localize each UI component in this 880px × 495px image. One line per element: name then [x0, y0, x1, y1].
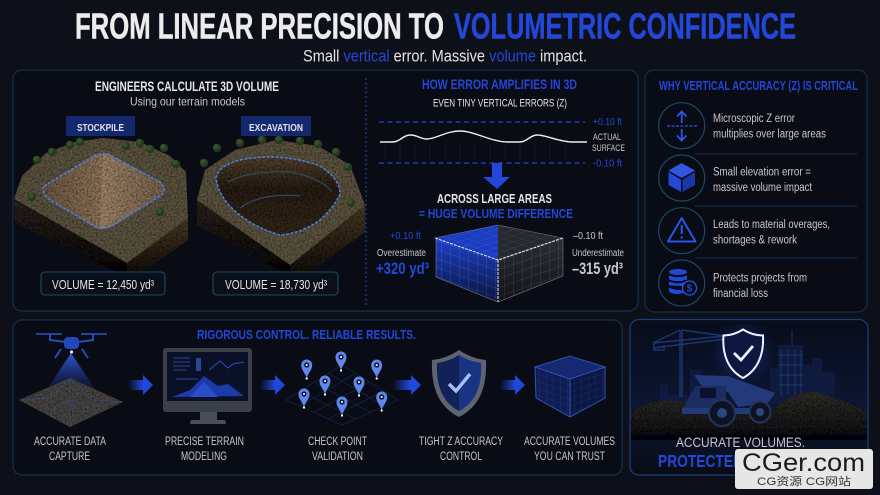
title: FROM LINEAR PRECISION TO	[75, 6, 444, 46]
item: financial loss: Protects projects from	[713, 272, 807, 284]
terrain: stockpile	[14, 138, 188, 272]
item: Z error multiplies: Microscopic Z error	[713, 113, 795, 125]
panel: rigorous control workflow	[13, 320, 622, 475]
step: accurate volumes	[524, 356, 615, 463]
callout: underestimate: Underestimate	[572, 248, 624, 259]
heading: across large areas: ACROSS LARGE AREAS	[437, 192, 552, 206]
arrow: step 1 to 2	[128, 375, 153, 395]
step: check point validation: CHECK POINT	[308, 436, 367, 448]
item: Z error multiplies: multiplies over large areas	[713, 128, 826, 140]
step: check point validation	[286, 352, 398, 463]
arrow: down	[483, 163, 510, 189]
item: material overages: Leads to material overages,	[713, 219, 830, 231]
callout: underestimate: –0.10 ft	[573, 230, 603, 242]
scene: glow	[721, 330, 765, 374]
item: financial loss	[659, 260, 807, 306]
subheading: terrain models: Using our terrain models	[130, 94, 245, 108]
callout: overestimate: +320 yd³	[376, 259, 429, 278]
icon: grid cube	[535, 356, 605, 417]
step: tight Z accuracy control	[419, 350, 503, 463]
heading: how error amplifies: HOW ERROR AMPLIFIES IN 3D	[422, 77, 577, 92]
step: precise terrain modeling: MODELING	[181, 451, 227, 463]
arrow: step 2 to 3	[260, 375, 285, 395]
icon: protection shield	[723, 330, 763, 378]
subheading: tiny vertical errors: EVEN TINY VERTICAL ERRORS (Z)	[433, 98, 567, 110]
panel: volume and error amplification	[13, 70, 638, 311]
step: precise terrain modeling	[163, 348, 252, 463]
icon: scanned terrain	[19, 378, 123, 427]
caption: accurate volumes: ACCURATE VOLUMES.	[676, 434, 805, 450]
heading: engineers calculate: ENGINEERS CALCULATE 3D VOLUME	[95, 79, 279, 94]
icon: check point pins	[298, 352, 387, 416]
icon: survey grid	[286, 365, 398, 425]
readout: stockpile volume	[41, 272, 165, 295]
item: financial loss: $	[687, 284, 693, 294]
item: small elevation error	[659, 155, 813, 201]
icon: shield	[432, 350, 486, 417]
subtitle: Small vertical error. Massive volume impact.	[303, 48, 587, 66]
chart: vertical error band: +0.10 ft	[593, 117, 622, 128]
step: accurate data capture: CAPTURE	[49, 451, 90, 463]
scene: dirt mounds	[631, 392, 867, 440]
readout: excavation volume: VOLUME = 18,730 yd³	[225, 277, 328, 292]
heading: huge volume difference: = HUGE VOLUME DIFFERENCE	[419, 207, 573, 221]
step: tight Z accuracy control: CONTROL	[440, 451, 482, 463]
item: Z error multiplies	[659, 103, 826, 149]
chart: vertical error band	[379, 117, 625, 170]
arrow: step 4 to 5	[500, 375, 525, 395]
item: material overages: shortages & rework	[713, 234, 797, 246]
callout: overestimate: +0.10 ft	[390, 230, 421, 242]
step: check point validation: VALIDATION	[312, 451, 363, 463]
step: precise terrain modeling: PRECISE TERRAIN	[165, 436, 244, 448]
item: small elevation error: Small elevation error =	[713, 166, 811, 178]
graphic: volume error cube	[435, 225, 563, 302]
chart: vertical error band: ACTUAL	[593, 132, 621, 142]
watermark: CGer.com	[742, 449, 865, 477]
step: accurate data capture: ACCURATE DATA	[34, 436, 106, 448]
panel: why vertical accuracy is critical	[645, 70, 867, 312]
tag: excavation: EXCAVATION	[249, 122, 303, 134]
tag: stockpile	[66, 116, 135, 136]
readout: excavation volume	[213, 272, 338, 295]
icon: monitor	[163, 348, 252, 424]
scene: skyline and crane	[653, 330, 835, 404]
icon: dump truck	[682, 375, 775, 426]
tag: stockpile: STOCKPILE	[77, 122, 124, 134]
terrain: excavation	[197, 136, 365, 272]
caption: protected: PROTECTED	[658, 451, 743, 471]
callout: overestimate: Overestimate	[377, 248, 426, 259]
step: accurate data capture	[19, 334, 123, 463]
watermark: CG资源 CG网站	[757, 474, 851, 488]
icon: drone	[36, 334, 107, 358]
callout: underestimate	[572, 230, 624, 278]
chart: vertical error band: -0.10 ft	[593, 158, 622, 170]
chart: vertical error band: SURFACE	[592, 143, 625, 153]
panel: protected outcome	[630, 320, 868, 475]
item: financial loss: financial loss	[713, 288, 768, 300]
callout: overestimate	[376, 230, 429, 278]
tag: excavation	[241, 116, 311, 136]
heading: rigorous control: RIGOROUS CONTROL. RELIABLE RESULTS.	[197, 327, 416, 342]
callout: underestimate: –315 yd³	[572, 259, 623, 278]
step: accurate volumes: ACCURATE VOLUMES	[524, 436, 615, 448]
icon: light cone	[45, 353, 97, 392]
watermark	[735, 449, 873, 489]
arrow: step 3 to 4	[393, 375, 421, 395]
step: tight Z accuracy control: TIGHT Z ACCURACY	[419, 436, 503, 448]
readout: stockpile volume: VOLUME = 12,450 yd³	[52, 277, 155, 292]
step: accurate volumes: YOU CAN TRUST	[534, 451, 605, 463]
item: material overages	[659, 208, 830, 254]
item: small elevation error: massive volume impact	[713, 182, 813, 194]
